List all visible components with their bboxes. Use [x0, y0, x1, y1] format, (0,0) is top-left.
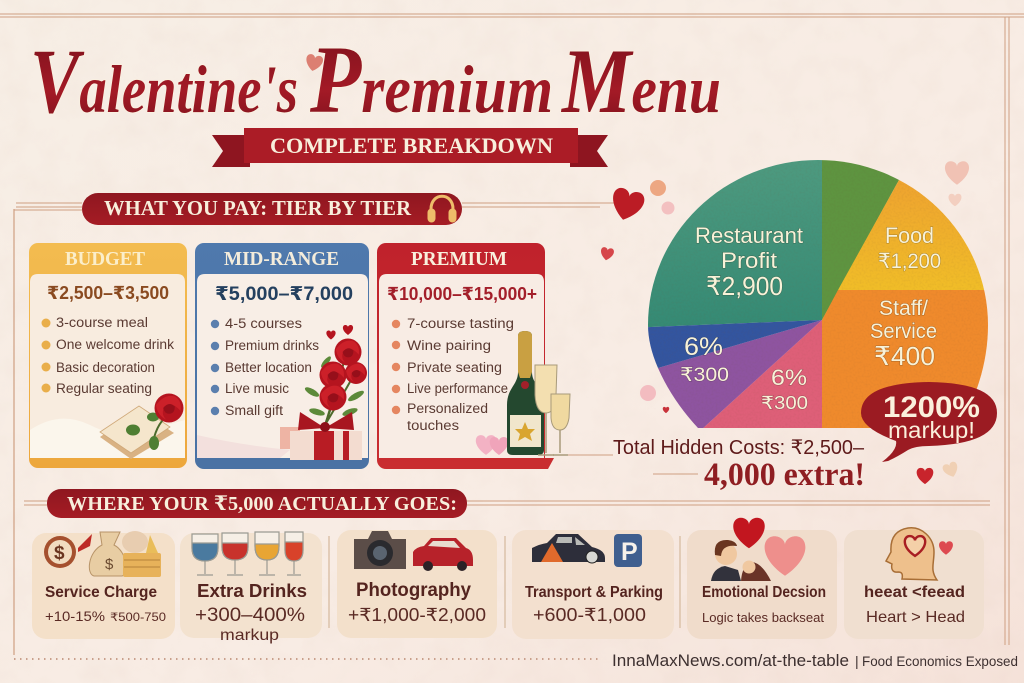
card: heart over head: Heart > Head	[866, 609, 965, 626]
card: extra drinks: +300–400%	[195, 605, 305, 626]
card: extra drinks: Extra Drinks	[197, 580, 307, 601]
ribbon: complete breakdown: COMPLETE BREAKDOWN	[270, 133, 553, 158]
slice: purple	[658, 320, 822, 428]
icon: napkin and rose	[100, 394, 184, 459]
card: extra drinks: markup	[220, 627, 279, 644]
icon: parking sign: P	[621, 538, 638, 566]
panel: premium tier: PREMIUM	[411, 248, 507, 270]
footer credit: Food Economics Exposed	[862, 654, 1018, 669]
icon: coin and money bags: $	[105, 556, 114, 573]
icon: title heart	[304, 53, 324, 73]
total hidden costs: Total Hidden Costs: ₹2,500–	[613, 437, 865, 459]
card: emotional decision	[687, 518, 837, 639]
pie labels: ₹300	[761, 393, 808, 413]
panel: mid-range tier: Small gift	[225, 403, 283, 418]
icon: coin and money bags	[44, 531, 161, 577]
pie labels: Restaurant	[695, 223, 803, 248]
panel: budget tier: ₹2,500–₹3,500	[47, 283, 169, 303]
card: emotional decision: Emotional Decsion	[702, 584, 826, 601]
icon: head with heart	[886, 528, 953, 580]
slice: blue	[648, 320, 822, 368]
pie labels: 6%	[771, 365, 807, 390]
decorative hearts around pie	[600, 161, 969, 484]
icon: champagne bottle	[507, 331, 544, 455]
panel: mid-range tier: Live music	[225, 381, 289, 396]
card: transport and parking: +600-₹1,000	[533, 605, 646, 625]
icon: red car	[413, 538, 473, 571]
icon: rose bouquet and gift	[280, 325, 367, 460]
ribbon: complete breakdown	[212, 128, 608, 167]
pie labels: ₹400	[874, 341, 935, 371]
heading: what you pay: WHAT YOU PAY: TIER BY TIER	[104, 196, 412, 220]
icon: champagne glasses	[535, 365, 570, 455]
panel: premium tier: Wine pairing	[407, 338, 491, 353]
pie labels: Profit	[721, 248, 777, 273]
panel: mid-range tier	[195, 243, 369, 469]
icon: couple and hearts	[711, 518, 805, 581]
callout: 1200% markup: 1200%	[883, 391, 980, 424]
icon: warning triangle	[541, 543, 563, 562]
footer credit: InnaMaxNews.com/at-the-table	[612, 651, 849, 670]
total hidden costs: 4,000 extra!	[704, 457, 865, 493]
panel: premium tier	[377, 243, 570, 469]
panel: premium tier: Live performance	[407, 381, 508, 396]
slice: food	[838, 180, 984, 290]
pie labels: Staff/	[879, 297, 928, 320]
panel: budget tier: Regular seating	[56, 381, 152, 396]
card: extra drinks	[180, 532, 322, 644]
icon: coin and money bags: $	[54, 543, 65, 564]
total hidden costs	[613, 437, 865, 493]
panel: budget tier	[29, 243, 187, 468]
panel: premium tier: 7-course tasting	[407, 316, 514, 331]
slice: staff and service	[822, 290, 988, 428]
slice: pink	[704, 320, 822, 428]
panel: mid-range tier: 4-5 courses	[225, 316, 302, 331]
panel: budget tier: Basic decoration	[56, 360, 155, 375]
card: transport and parking: Transport & Parking	[525, 584, 663, 601]
illustration wave	[30, 419, 185, 458]
panel: premium tier: ₹10,000–₹15,000+	[387, 284, 537, 304]
panel: budget tier: One welcome drink	[56, 337, 174, 352]
panel: premium tier: Personalized	[407, 401, 488, 416]
icon: dark car	[532, 534, 605, 563]
card: transport and parking	[512, 530, 674, 639]
pie labels: ₹1,200	[878, 250, 941, 273]
pie labels	[680, 223, 941, 413]
icon: parking sign	[614, 534, 642, 567]
callout: 1200% markup	[861, 382, 997, 462]
panel: mid-range tier: MID-RANGE	[224, 248, 339, 270]
panel: premium tier: touches	[407, 418, 459, 433]
panel: budget tier: 3-course meal	[56, 315, 148, 330]
card: heart over head: heeat <feead	[864, 584, 965, 601]
panel: mid-range tier: ₹5,000–₹7,000	[215, 284, 353, 305]
card: service charge: +10-15%	[45, 608, 105, 624]
footer credit: |	[855, 653, 859, 669]
heading: what you pay	[82, 193, 462, 225]
icon: pink hearts box	[476, 435, 508, 455]
card: photography: Photography	[356, 580, 471, 601]
pie chart	[648, 160, 988, 428]
pie labels: 6%	[684, 333, 723, 361]
callout: 1200% markup: markup!	[888, 417, 975, 443]
icon: four wine glasses	[192, 532, 303, 575]
panel: budget tier: BUDGET	[65, 248, 146, 270]
card: service charge: Service Charge	[45, 584, 157, 601]
pie labels: ₹2,900	[706, 271, 783, 301]
card: service charge: ₹500-750	[110, 612, 166, 624]
card: photography: +₹1,000-₹2,000	[348, 605, 486, 625]
title: Premium	[309, 26, 553, 133]
footer credit	[612, 651, 1018, 670]
slice: restaurant profit	[640, 150, 822, 328]
card: emotional decision: Logic takes backseat	[702, 610, 824, 625]
title: Valentine's	[30, 30, 298, 132]
card: heart over head	[844, 528, 984, 639]
heading: where your money goes: WHERE YOUR ₹5,000 ACTUALLY GOES:	[67, 493, 457, 515]
heading: where your money goes	[47, 489, 467, 518]
panel: mid-range tier: Premium drinks	[225, 338, 319, 353]
panel: mid-range tier: Better location	[225, 360, 312, 375]
pie labels: Food	[885, 223, 934, 248]
panel: premium tier: Private seating	[407, 360, 502, 375]
slice: green	[822, 160, 899, 320]
icon: camera	[354, 531, 406, 569]
title	[30, 26, 721, 133]
title: Menu	[560, 30, 721, 132]
card: service charge	[32, 531, 175, 639]
pie labels: ₹300	[680, 365, 729, 386]
icon: headphones	[429, 196, 455, 221]
pie labels: Service	[870, 320, 937, 343]
card: photography	[337, 530, 497, 638]
